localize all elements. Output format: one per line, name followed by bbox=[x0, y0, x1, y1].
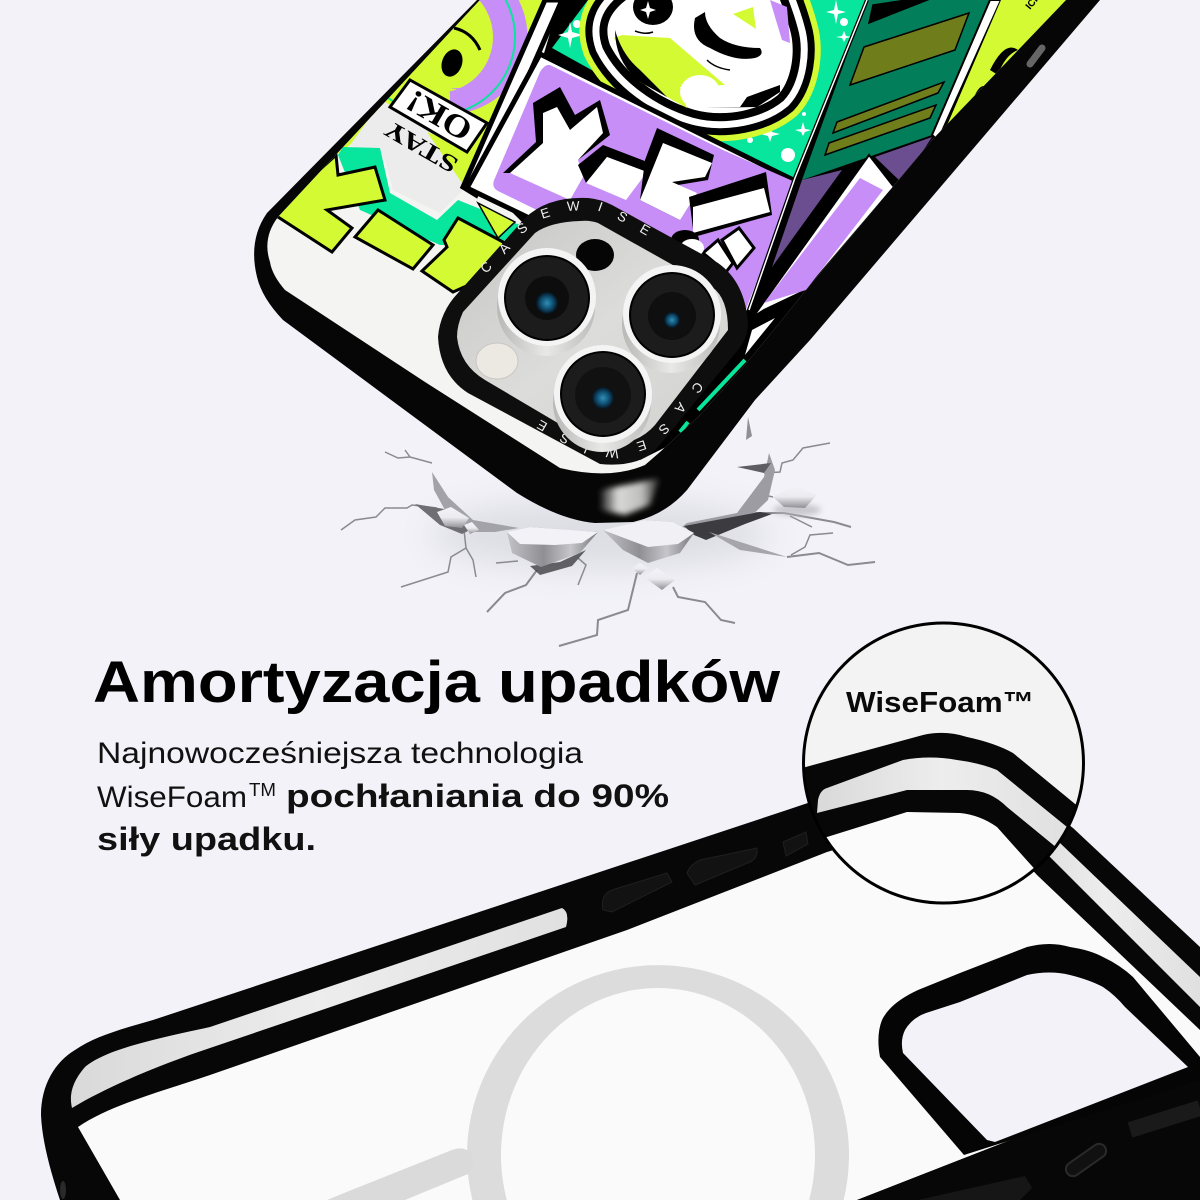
lower corner white zigzag bbox=[745, 318, 775, 355]
ground crack impact bbox=[341, 417, 875, 646]
magnifier background bbox=[804, 623, 1084, 903]
curved brand text top: CASEWISE bbox=[481, 201, 650, 272]
thin white divider line bbox=[749, 0, 867, 310]
lettering A and hand bbox=[671, 172, 772, 272]
lime artwork base bbox=[335, 0, 542, 174]
lens 1 bbox=[497, 248, 596, 356]
purple panel bbox=[493, 65, 795, 312]
clear back panel bbox=[78, 824, 1200, 1200]
mint edge strip bbox=[680, 360, 745, 432]
camera plate bbox=[457, 221, 728, 445]
speech bubble OK: OK! bbox=[400, 83, 478, 149]
body text: siły upadku. bbox=[97, 821, 316, 857]
flash bbox=[476, 343, 518, 379]
frame diagonal strip bbox=[463, 0, 562, 195]
screen inner white lip bbox=[267, 0, 1066, 473]
magsafe alignment pill bbox=[327, 1148, 474, 1200]
right foam gap bbox=[1010, 805, 1200, 1007]
number shape three bbox=[422, 218, 505, 292]
microphone hole bbox=[576, 239, 614, 271]
right white strip bbox=[932, 0, 1001, 140]
left foam gap bbox=[71, 908, 567, 1108]
sticker artwork bbox=[270, 0, 1070, 460]
mascot face sticker bbox=[607, 0, 793, 113]
purple triangle sticker bbox=[753, 155, 894, 317]
volume buttons bbox=[602, 832, 808, 912]
lime under speech bubble bbox=[427, 132, 466, 183]
body text: WiseFoam bbox=[97, 781, 247, 814]
magnified frame detail bbox=[805, 732, 1076, 868]
number shape one bbox=[270, 155, 385, 252]
magnifier label: WiseFoam™ bbox=[846, 687, 1034, 719]
star sparkles bbox=[558, 0, 852, 162]
camera cut-out window bbox=[902, 972, 1188, 1142]
side button highlight bbox=[1030, 48, 1042, 64]
body text: TM bbox=[249, 780, 276, 800]
camera bumper ring bbox=[438, 198, 748, 465]
magsafe ring bbox=[467, 965, 849, 1200]
speech bubble OK bbox=[390, 80, 487, 152]
body text: Najnowocześniejsza technologia bbox=[97, 737, 583, 770]
purple sticker frame bbox=[467, 54, 797, 322]
mint star panel bbox=[552, 0, 868, 178]
bottom right buttons bbox=[918, 1108, 1200, 1200]
phone with printed case bbox=[254, 0, 1100, 523]
right lime area bbox=[945, 0, 1068, 130]
dark purple triangles bbox=[772, 170, 842, 267]
number shape two bbox=[355, 210, 433, 269]
smiley sticker bbox=[388, 0, 528, 112]
transparent case back bbox=[41, 764, 1200, 1200]
heading: Amortyzacja upadków bbox=[93, 650, 781, 715]
label STAY: STAY bbox=[380, 115, 463, 177]
gloss highlight on case corner bbox=[600, 478, 660, 515]
body text bbox=[97, 737, 669, 857]
black artwork underlay bbox=[500, 0, 1070, 460]
light sticker sheet behind STAY bbox=[350, 102, 435, 145]
camera cut-out frame bbox=[878, 944, 1200, 1155]
dark green panel bbox=[802, 0, 990, 180]
lens 2 bbox=[622, 265, 721, 373]
case outer black frame bbox=[41, 764, 1200, 1200]
mint zig shape bbox=[338, 147, 520, 245]
curved brand text bottom: CASEWISE bbox=[536, 383, 702, 458]
battery bars bbox=[825, 0, 969, 155]
lettering Y bbox=[503, 87, 610, 200]
magnifier ring bbox=[804, 623, 1084, 903]
body text: pochłaniania do 90% bbox=[286, 778, 669, 814]
lime wedge under frame bbox=[478, 203, 515, 238]
left side hole bbox=[60, 1181, 66, 1199]
phone case outer black body bbox=[254, 0, 1100, 523]
lens 3 bbox=[553, 345, 652, 452]
magnifier callout bbox=[780, 623, 1090, 910]
bottom edge band bbox=[857, 1063, 1200, 1200]
lettering E bbox=[578, 128, 714, 220]
